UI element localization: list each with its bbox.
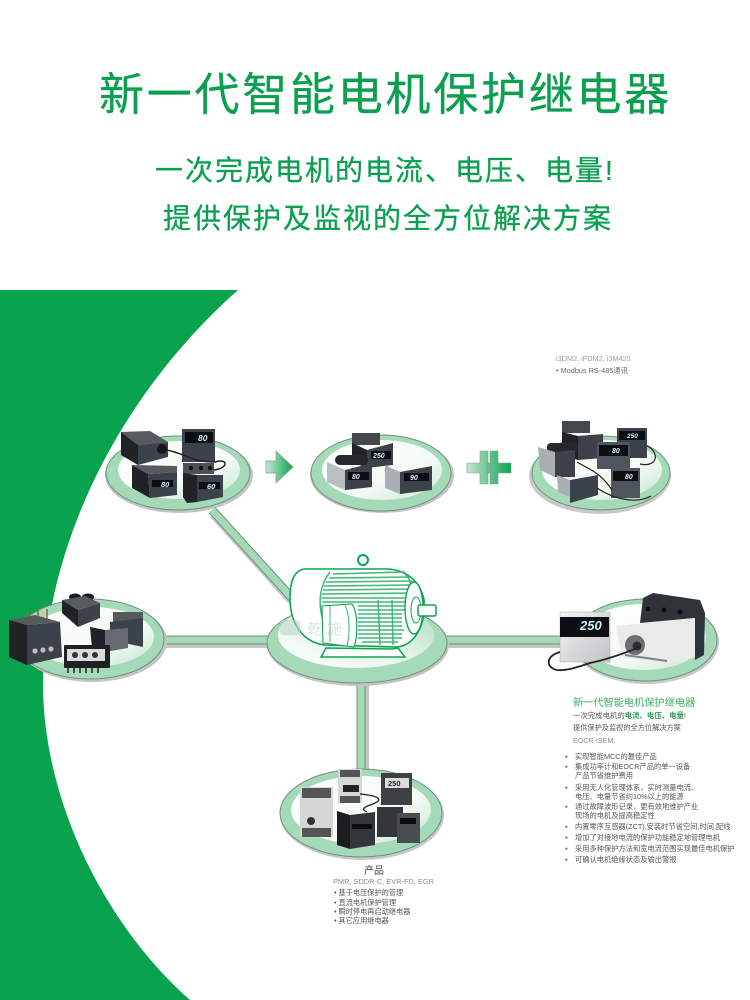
device: terminal block (640, 593, 705, 660)
device: display unit (381, 773, 412, 805)
device: top relay (562, 421, 603, 460)
model name: EOCR-iSEM, (573, 736, 615, 745)
background: green curved panel (0, 290, 238, 1000)
hub: right iSEM relay (549, 593, 719, 684)
feature bullets: ▪ (565, 855, 568, 864)
device: display unit (182, 429, 215, 462)
device: relay lower right (183, 463, 223, 503)
model list: PMR, SDDR-C, EVR-FD, EGR (333, 877, 434, 886)
device: rear display: 250 (626, 433, 638, 440)
bullet list: • 瞬时停电再启动继电器 (334, 907, 410, 916)
device: display unit: 250 (388, 779, 401, 788)
feature bullets: 电压、电量节省约10%以上的能源 (575, 792, 684, 801)
bullet list: • 其它应用继电器 (334, 916, 389, 925)
text block: iSEM features (565, 696, 735, 864)
hub ellipse (529, 436, 671, 514)
device: top relay: 250 (372, 453, 385, 460)
feature bullets: 可确认电机绝缘状态及输出警报 (575, 855, 677, 864)
device: middle display (597, 442, 630, 469)
device: rear display (617, 428, 647, 458)
device: top overload relay (62, 594, 100, 627)
hub: left relay group (9, 594, 167, 682)
device: right overload relay front (90, 627, 128, 652)
feature bullets: ▪ (565, 802, 568, 811)
caption: i3DM2, iFDM2, i3M420 (556, 354, 631, 363)
subtitle: line 2: 提供保护及监视的全方位解决方案 (163, 203, 613, 234)
feature bullets: 采用无人化管理体系，实时测量电流、 (575, 783, 698, 792)
hub ellipse (16, 599, 167, 682)
intro line: 一次完成电机的电流、电压、电量! (573, 711, 686, 720)
device: white relay body (616, 618, 695, 665)
device: small drive 1 (377, 807, 403, 837)
device: right relay: 90 (410, 475, 418, 482)
intro line 2: 提供保护及监视的全方位解决方案 (573, 723, 681, 732)
device: lower module (557, 475, 598, 503)
icon: electric motor (290, 555, 436, 657)
hub ellipse (573, 599, 719, 684)
panel heading: 新一代智能电机保护继电器 (573, 696, 695, 709)
device: right relay (385, 465, 432, 494)
feature bullets: ▪ (565, 833, 568, 842)
device: relay lower left: 80 (161, 480, 170, 489)
device: large relay (9, 609, 62, 665)
device: right overload relay back (110, 612, 143, 647)
heading: 产品 (364, 864, 384, 877)
hub: relay group 2 (310, 433, 454, 513)
feature bullets: 采用多种保护方法和宽电流范围实现最佳电机保护 (575, 844, 735, 853)
device: silver display: 250 (579, 618, 602, 633)
subtitle: line 1: 一次完成电机的电流、电压、电量! (155, 155, 615, 186)
device: gray relay (300, 787, 333, 837)
cables (577, 446, 655, 500)
feature bullets: 现场的电机及提高稳定性 (575, 811, 655, 820)
device: silver display (560, 612, 610, 662)
device: display unit: 80 (198, 433, 208, 443)
device: relay module upper left (121, 431, 168, 465)
bullet list (334, 888, 410, 925)
device: lower display: 80 (625, 474, 633, 481)
feature bullets: ▪ (565, 844, 568, 853)
plus icon (467, 451, 511, 484)
hub: relay group 1 (105, 429, 253, 513)
bullet list: • 直流电机保护管理 (334, 898, 396, 907)
device: analog relay (64, 645, 110, 673)
hub ellipse (267, 602, 449, 686)
device: left module (538, 443, 578, 477)
device: relay lower left (132, 465, 177, 498)
text block: products (333, 864, 434, 925)
feature bullets (565, 752, 735, 864)
watermark: 乾施 (307, 621, 347, 638)
feature bullets: 集成功率计和EOCR产品的单一设备 (575, 762, 691, 771)
device: relay lower right: 60 (207, 482, 216, 491)
feature bullets: ▪ (565, 752, 568, 761)
cable (549, 647, 640, 670)
feature bullets: ▪ (565, 822, 568, 831)
hub: bottom products (280, 769, 444, 860)
hub ellipse (310, 435, 454, 513)
feature bullets: ▪ (565, 762, 568, 771)
bullet list: • 基于电压保护的管理 (334, 888, 403, 897)
hub: relay group 3 (529, 354, 671, 514)
connector network (165, 510, 570, 772)
hub: central motor (267, 555, 449, 686)
feature bullets: 产品节省维护费用 (575, 771, 633, 780)
caption: • Modbus RS-485通讯 (556, 366, 629, 375)
caption (556, 354, 631, 375)
device: lower display (611, 468, 640, 498)
title: 新一代智能电机保护继电器 (99, 69, 672, 120)
cable (360, 794, 379, 812)
feature bullets: 实现智能MCC的最佳产品 (575, 752, 657, 761)
hub ellipse (280, 769, 444, 860)
device: top relay (352, 433, 393, 468)
device: left relay: 80 (352, 474, 360, 481)
feature bullets: 通过故障波形记录，更有效地维护产业 (575, 802, 698, 811)
feature bullets: 增加了对接地电流的保护功能稳定地管理电机 (575, 833, 721, 842)
device: small drive 2 (397, 813, 420, 843)
device: middle display: 80 (612, 448, 620, 455)
hub ellipse (105, 436, 253, 513)
watermark (280, 620, 347, 638)
feature bullets: ▪ (565, 783, 568, 792)
device: left relay (327, 455, 372, 490)
cable (166, 450, 225, 470)
device: small white relay (338, 769, 362, 803)
arrow: right (266, 451, 293, 483)
feature bullets: 内置零序互感器(ZCT),安装时节省空间,时间,配线 (575, 822, 730, 831)
device: black relay (337, 811, 375, 849)
